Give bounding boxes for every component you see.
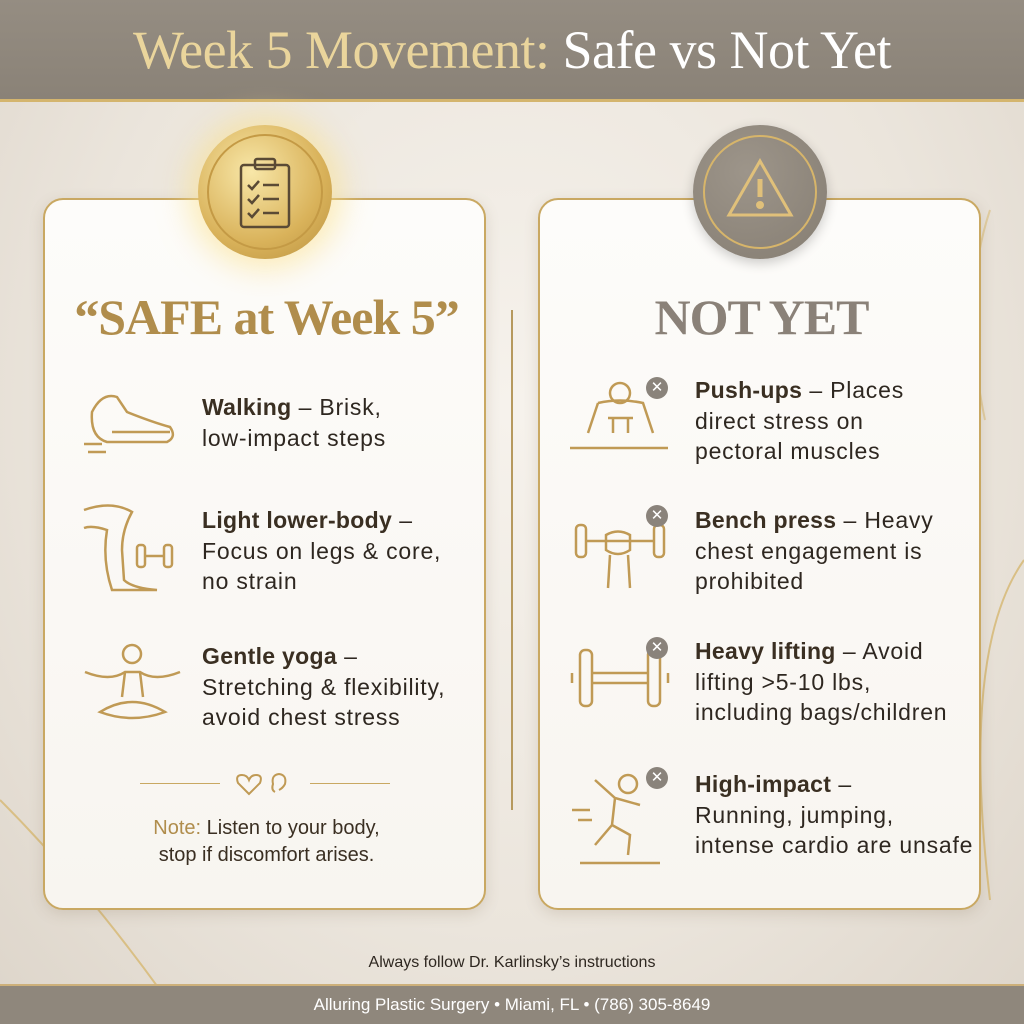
icon: shoe — [84, 394, 174, 454]
icon: leg with dumbbell — [84, 504, 174, 592]
heading: safe: “SAFE at Week 5” — [74, 289, 459, 345]
text: walking: Walking – Brisk, — [202, 394, 382, 420]
text: high-impact: Running, jumping, — [695, 802, 894, 828]
text: walking — [202, 394, 386, 451]
text: bench press — [695, 507, 934, 594]
text: bench press: Bench press – Heavy — [695, 507, 934, 533]
text: heavy lifting: lifting >5-10 lbs, — [695, 668, 871, 694]
x badge — [646, 377, 668, 399]
icon: runner — [572, 774, 660, 864]
footer note: Always follow Dr. Karlinsky’s instructions — [369, 954, 655, 971]
title: Week 5 Movement: Safe vs Not Yet — [133, 20, 891, 80]
icon: yoga — [84, 644, 180, 720]
icon: dumbbell in hand — [574, 524, 666, 588]
text: heavy lifting: Heavy lifting – Avoid — [695, 638, 923, 664]
divider with heart and ear icons — [140, 773, 390, 796]
footer band: Alluring Plastic Surgery • Miami, FL • (786) 305-8649 — [314, 995, 710, 1014]
text: gentle yoga: Gentle yoga – — [202, 643, 358, 669]
text: high-impact: High-impact – — [695, 771, 852, 797]
icon: dumbbell — [570, 648, 670, 708]
text: push-ups — [695, 377, 904, 464]
x badge: ✕ — [651, 379, 663, 396]
panel: not yet — [538, 198, 981, 910]
text: light lower-body: no strain — [202, 568, 297, 594]
icon: warning medallion — [693, 125, 827, 259]
header band — [0, 0, 1024, 102]
panel: not yet: ✕ — [651, 639, 663, 656]
text: heavy lifting: including bags/children — [695, 699, 947, 725]
text: push-ups: direct stress on — [695, 408, 864, 434]
text: high-impact — [695, 771, 973, 858]
panel: safe — [43, 198, 486, 910]
panel: not yet: ✕ — [651, 507, 663, 524]
center divider — [511, 310, 513, 810]
icon: gold clipboard medallion — [198, 125, 332, 259]
text: light lower-body — [202, 507, 441, 594]
note: Note: Listen to your body, — [153, 817, 380, 839]
heading: not yet: NOT YET — [655, 289, 868, 345]
footer band — [0, 984, 1024, 1024]
text: high-impact: intense cardio are unsafe — [695, 832, 973, 858]
text: gentle yoga — [202, 643, 445, 730]
panel: not yet: ✕ — [651, 769, 663, 786]
text: bench press: chest engagement is — [695, 538, 922, 564]
text: light lower-body: Focus on legs & core, — [202, 538, 441, 564]
icon: push-ups — [570, 382, 668, 450]
text: light lower-body: Light lower-body – — [202, 507, 413, 533]
text: push-ups: Push-ups – Places — [695, 377, 904, 403]
note — [153, 817, 380, 866]
text: walking: low-impact steps — [202, 424, 386, 450]
text: bench press: prohibited — [695, 568, 804, 594]
text: heavy lifting — [695, 638, 947, 725]
text: gentle yoga: Stretching & flexibility, — [202, 674, 445, 700]
text: gentle yoga: avoid chest stress — [202, 704, 400, 730]
text: push-ups: pectoral muscles — [695, 438, 880, 464]
note: stop if discomfort arises. — [159, 844, 374, 866]
